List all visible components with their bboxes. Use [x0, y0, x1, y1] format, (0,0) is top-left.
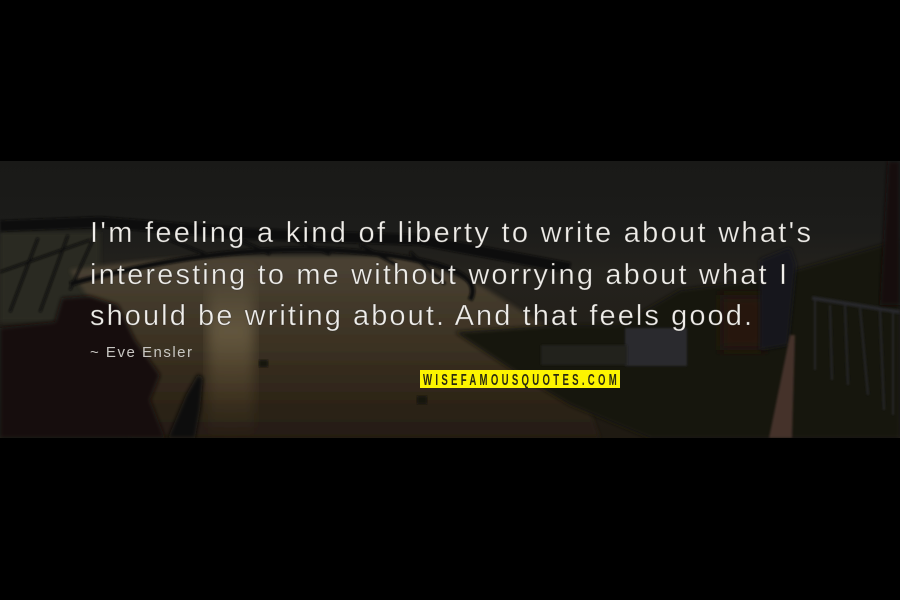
lamp post: [880, 161, 900, 305]
boat on river: [259, 360, 268, 367]
river water: [70, 256, 600, 438]
quote line 3: should be writing about. And that feels good.: [90, 300, 752, 332]
boathouse: [625, 328, 687, 366]
watermark badge: [420, 370, 620, 389]
left bridge backdrop: [0, 232, 100, 322]
sun reflection: [208, 262, 254, 438]
photo panel: bridge over river at sunset: [0, 161, 900, 438]
attribution: ~ Eve Ensler: [90, 344, 192, 361]
pedestrian walkway strip: [769, 335, 795, 438]
quote text: [90, 217, 811, 332]
dark pier post: [168, 374, 203, 438]
right bank with trees and buildings: [455, 240, 900, 438]
boathouse roof: [541, 345, 627, 365]
infographic: quote card on black background: [0, 161, 900, 438]
walkway railing: [812, 298, 900, 415]
second boat on river: [417, 396, 427, 404]
quote line 1: I'm feeling a kind of liberty to write about what's: [90, 217, 811, 249]
bridge deck and arch: [0, 222, 570, 312]
left shoreline trees: [0, 296, 165, 438]
quote line 2: interesting to me without worrying about what I: [90, 259, 787, 291]
tower silhouette: [760, 248, 796, 350]
watermark text: WISEFAMOUSQUOTES.COM: [423, 370, 617, 389]
autumn trees: [720, 295, 759, 350]
